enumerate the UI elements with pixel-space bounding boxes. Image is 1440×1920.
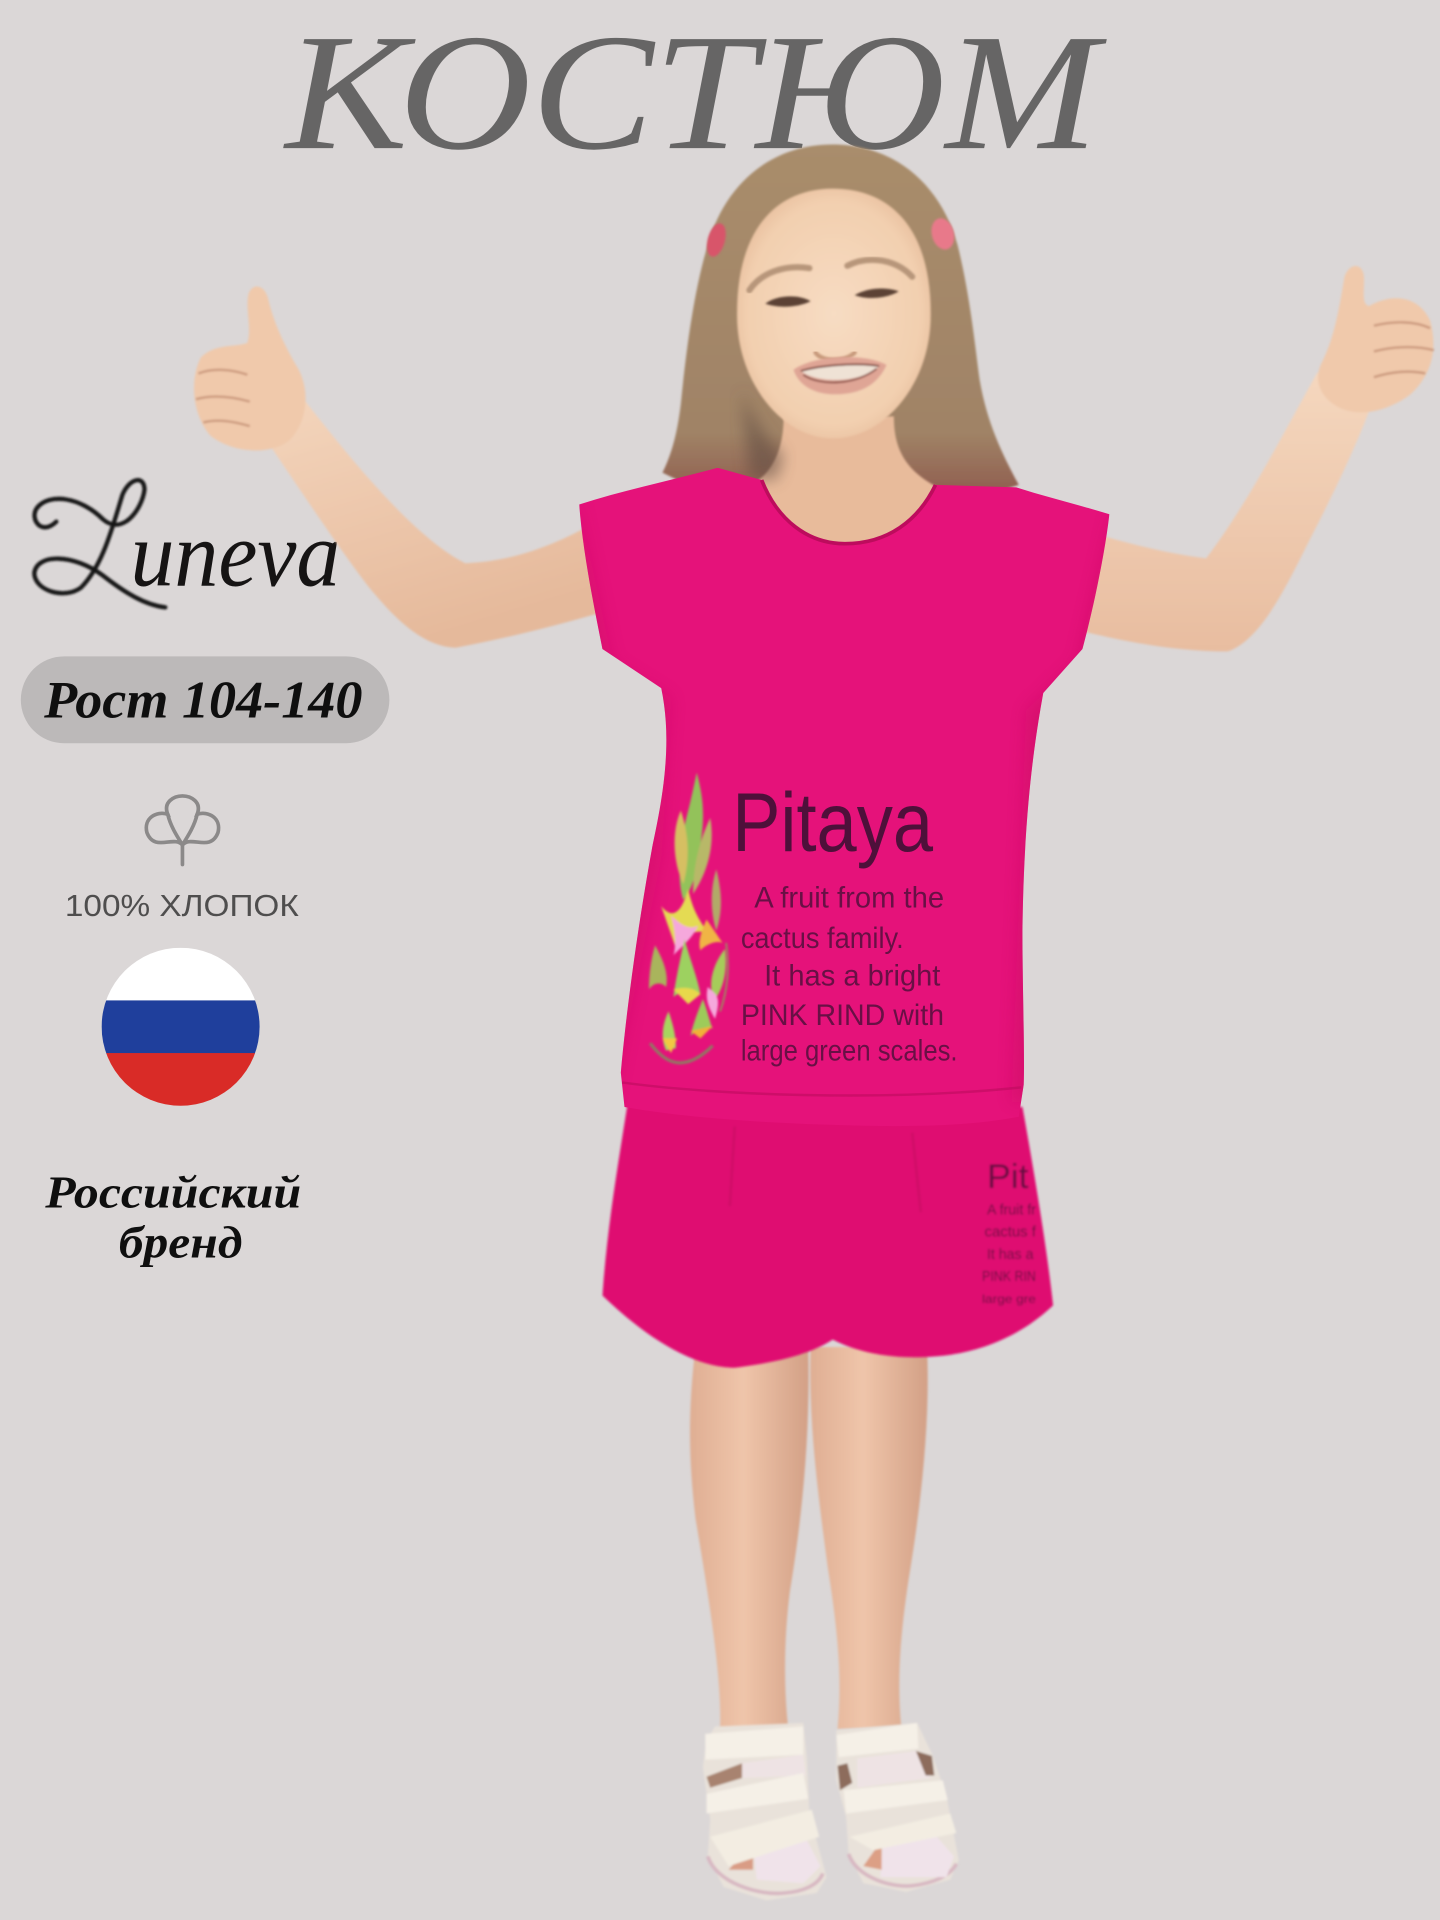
shirt print: description: It has a bright [764,960,940,993]
shorts print: PINK RIN [982,1269,1036,1285]
left thumbs-up hand [194,287,306,450]
hair shadow near neck [742,389,784,480]
shorts pleats [730,1127,921,1212]
right thumbs-up hand [1318,266,1434,412]
left arm [194,287,602,648]
shirt print: description: PINK RIND with [741,999,944,1032]
right sandal floral upper [880,1837,954,1877]
shirt print: Pitaya heading: Pitaya [732,776,934,869]
height badge: Рост 104-140 [43,672,362,730]
left sandal [703,1723,827,1900]
left forearm and upper arm [272,399,602,648]
shirt print: description [741,881,958,1067]
nose [816,353,855,360]
caption: Russian brand: Российский [44,1167,301,1217]
hair clips [704,216,958,259]
icon: Russian flag [102,948,261,1107]
smile [793,357,887,394]
shirt print: description: A fruit from the [754,881,944,914]
shorts [602,1100,1053,1368]
neck [753,416,943,557]
cotton label: 100% ХЛОПОК [65,889,299,923]
brand logo: Luneva: Luneva [129,503,340,606]
eyes [765,288,899,307]
hem line [622,1082,1021,1095]
left sandal floral upper [753,1840,820,1883]
shirt print: description: cactus family. [741,922,904,955]
eyebrows [749,260,912,290]
shorts print: Pit [987,1158,1029,1196]
right sandal [836,1723,959,1892]
right sandal sole [849,1854,956,1886]
height badge [21,656,389,743]
shorts print: It has a [987,1247,1034,1263]
photo: girl in pink outfit [194,144,1434,1900]
right arm [1085,266,1434,651]
caption: Russian brand: бренд [119,1218,242,1268]
neckline collar [762,480,936,544]
t-shirt [563,453,1127,1139]
left sandal sole [708,1856,823,1893]
legs [690,1347,928,1731]
caption: Russian brand [44,1167,301,1268]
brand logo: Luneva [34,480,340,607]
shorts print: cactus f [984,1225,1037,1241]
shirt print: dragon fruit [649,773,728,1063]
title: КОСТЮМ [283,1,1107,185]
shorts print: large gre [982,1292,1036,1306]
shorts print [982,1158,1037,1306]
shirt body [563,453,1127,1139]
hair back [662,144,1019,514]
shirt print: description: large green scales. [741,1034,958,1067]
shorts print: A fruit fr [987,1203,1036,1219]
right forearm and upper arm [1085,372,1369,651]
icon: cotton boll [146,796,219,864]
face [704,189,958,438]
